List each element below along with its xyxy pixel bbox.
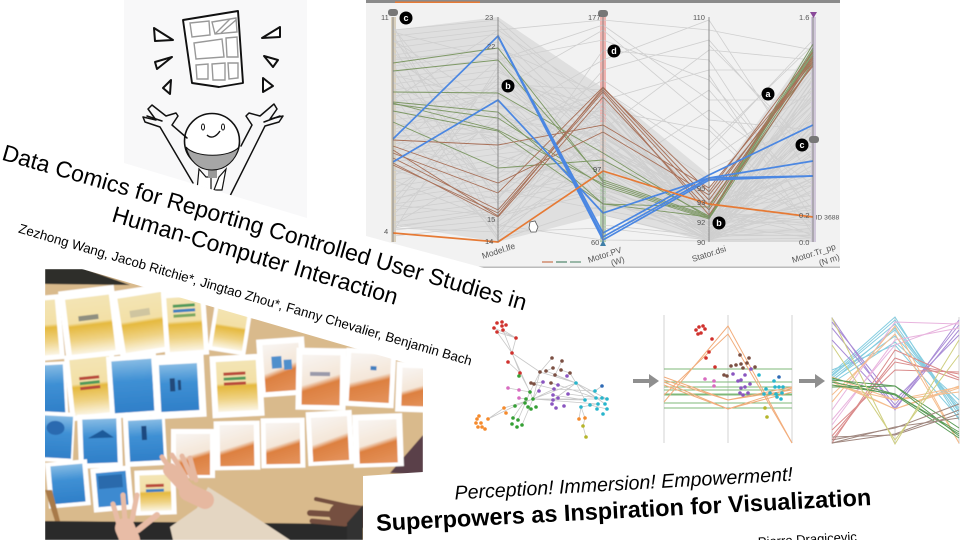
axis tick labels: 14: [485, 237, 493, 246]
axis highlight bands: [391, 17, 816, 242]
title: data comics paper: Data Comics for Reporting Controlled User Studies in: [0, 139, 530, 315]
hand: reaching: [162, 455, 205, 500]
chart: grey density underlay: [393, 17, 813, 242]
axis tick labels: 0.0: [799, 238, 809, 247]
callout badges: d: [611, 46, 617, 56]
axis tick labels: 90: [697, 238, 705, 247]
subtitle: superpowers paper: Perception! Immersion! Empowerment!: [454, 464, 794, 504]
axis tick labels: 15: [487, 215, 495, 224]
icon: excitement sparks: [154, 27, 280, 94]
cards: yellow row: [29, 283, 253, 361]
axis tick labels: [381, 13, 840, 247]
axis tick labels: 92: [697, 218, 705, 227]
axis tick labels: 177: [588, 13, 601, 22]
chart: grey context lines: [393, 20, 813, 241]
axis tick labels: 11: [381, 13, 389, 22]
arrow: network to hybrid: [633, 374, 659, 388]
axis tick labels: 60: [591, 238, 599, 247]
callout badges: c: [799, 140, 805, 150]
chart: blue selected lines: [393, 36, 813, 240]
authors: data comics paper: Zezhong Wang, Jacob Ritchie*, Jingtao Zhou*, Fanny Chevalier, Benjamin Bach: [17, 221, 474, 368]
callout badges: b: [716, 218, 722, 228]
chart: orange highlighted line: [393, 171, 813, 242]
axis titles: Motor.Tr_pp: [791, 241, 837, 265]
panel: photo of data comic cards on a table: [29, 269, 437, 540]
callout badges: a: [765, 89, 771, 99]
figure: hybrid scatter and parallel plot: [664, 315, 792, 443]
axis titles: Motor.PV: [587, 244, 623, 265]
axis tick labels: 95: [697, 184, 705, 193]
axis tick labels: 0.2: [799, 211, 809, 220]
axis handles: [388, 9, 819, 246]
sleeve: [170, 487, 290, 540]
cards: second row: [34, 336, 437, 421]
axis tick labels: 93: [697, 198, 705, 207]
arrow: hybrid to parallel: [799, 374, 825, 388]
panel: comic illustration: [142, 10, 284, 196]
axis tick labels: 23: [485, 13, 493, 22]
axis titles: (N m): [818, 252, 841, 268]
axis tick labels: 97: [593, 165, 601, 174]
bottom dark floor: [45, 521, 363, 540]
figure: parallel coordinates overview: [832, 317, 959, 444]
cards: third row: [37, 410, 404, 478]
axis tick labels: 22: [487, 42, 495, 51]
hand: lower: [113, 495, 157, 540]
hand: dark, right side: [310, 499, 363, 524]
legend dashes: [542, 261, 581, 263]
axis titles: [482, 244, 840, 267]
icon: comic page: [183, 11, 243, 87]
axes: [393, 17, 813, 242]
cards: fourth row: [45, 459, 177, 516]
axis tick labels: 1.6: [799, 13, 809, 22]
axis titles: Model.lfe: [481, 241, 517, 261]
axis tick labels: 110: [693, 13, 705, 22]
axis tick labels: ID 3688: [816, 214, 840, 222]
chart: green selected lines: [393, 44, 813, 219]
axis titles: Stator.dsi: [691, 243, 727, 264]
callout badges: b: [505, 81, 511, 91]
axis titles: (W): [610, 254, 626, 268]
chart: brown selected lines: [393, 52, 813, 217]
figure: network graph: [474, 320, 609, 439]
panel: parallel coordinates: [366, 0, 841, 268]
title: superpowers paper: Superpowers as Inspiration for Visualization: [375, 484, 872, 536]
icon: hand cursor: [529, 221, 538, 232]
callout badges: c: [403, 13, 409, 23]
axis tick labels: 4: [384, 227, 388, 236]
callout badges: [400, 12, 808, 230]
icon: cheering character: [143, 104, 283, 198]
title: data comics paper: Human-Computer Interaction: [109, 201, 401, 310]
